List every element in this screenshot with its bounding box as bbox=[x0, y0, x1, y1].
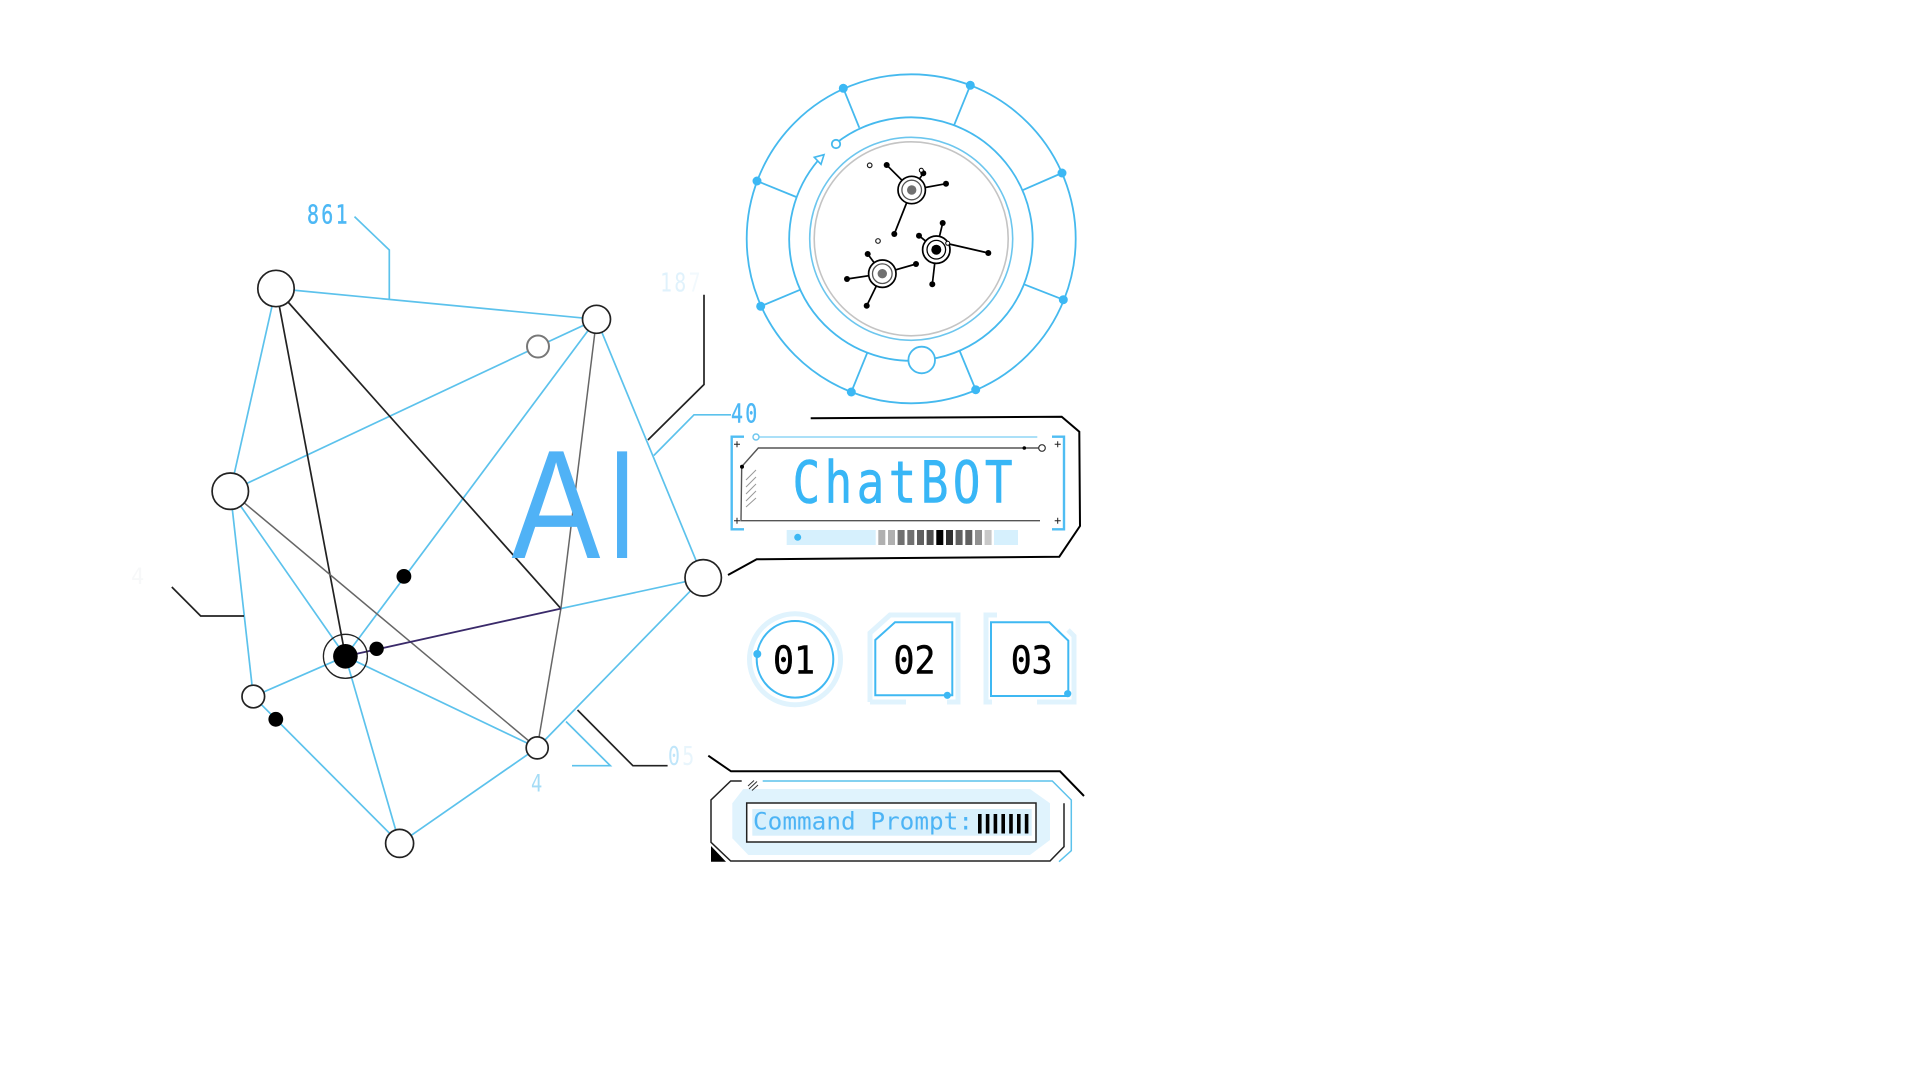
callout: 40: 40 bbox=[731, 400, 760, 429]
callout: 861: 861 bbox=[307, 201, 350, 230]
dark network links bbox=[230, 288, 597, 748]
callout: 40 bbox=[654, 400, 760, 456]
molecule 2 bbox=[876, 220, 991, 287]
badge: 01: 01 bbox=[773, 638, 815, 683]
callout: 187: 187 bbox=[660, 269, 703, 298]
light background bbox=[732, 789, 1050, 855]
molecule 3 bbox=[844, 251, 919, 309]
network diagram bbox=[212, 270, 721, 857]
outer black frame bbox=[728, 417, 1080, 575]
prompt text: Command Prompt: bbox=[753, 807, 973, 835]
callout: 05: 05 bbox=[668, 742, 697, 771]
panel: command prompt bbox=[708, 756, 1084, 862]
badge: 02: 02 bbox=[894, 638, 936, 683]
network nodes bbox=[212, 270, 721, 857]
cursor bars bbox=[978, 814, 1028, 834]
faint left callout bbox=[131, 565, 244, 616]
faint left callout: 4 bbox=[131, 565, 144, 590]
radial dial bbox=[747, 74, 1076, 403]
heading: ChatBOT: ChatBOT bbox=[792, 451, 1017, 517]
title: AI: I bbox=[607, 419, 637, 592]
blue frame bbox=[763, 781, 1071, 862]
panel: ChatBOT bbox=[728, 417, 1080, 575]
blue network links bbox=[230, 288, 703, 843]
callout: 187 bbox=[648, 269, 704, 440]
dial markers bbox=[814, 140, 935, 373]
inner black frame bbox=[711, 781, 1064, 861]
callout: 05 bbox=[566, 710, 697, 771]
dial spokes and dots bbox=[752, 81, 1068, 397]
dial rings bbox=[747, 74, 1076, 403]
status bar bbox=[787, 530, 1018, 545]
input box bbox=[747, 803, 1036, 842]
hatch bbox=[748, 780, 758, 790]
corner plus marks bbox=[734, 441, 1061, 524]
top black frame bbox=[708, 756, 1084, 796]
inner gray frame bbox=[740, 445, 1045, 521]
top blue rule bbox=[753, 434, 1037, 440]
badge: 01 bbox=[750, 614, 840, 705]
badge: 03 bbox=[986, 615, 1074, 702]
molecule 1 bbox=[867, 162, 949, 237]
badge: 02 bbox=[870, 615, 958, 702]
blue brackets bbox=[732, 437, 1064, 529]
hatch bbox=[746, 470, 756, 507]
callout: 861 bbox=[307, 201, 389, 299]
label: 4: 4 bbox=[531, 770, 542, 798]
title: AI: A bbox=[512, 418, 601, 591]
badge: 03: 03 bbox=[1011, 638, 1053, 683]
corner triangle bbox=[711, 846, 726, 862]
